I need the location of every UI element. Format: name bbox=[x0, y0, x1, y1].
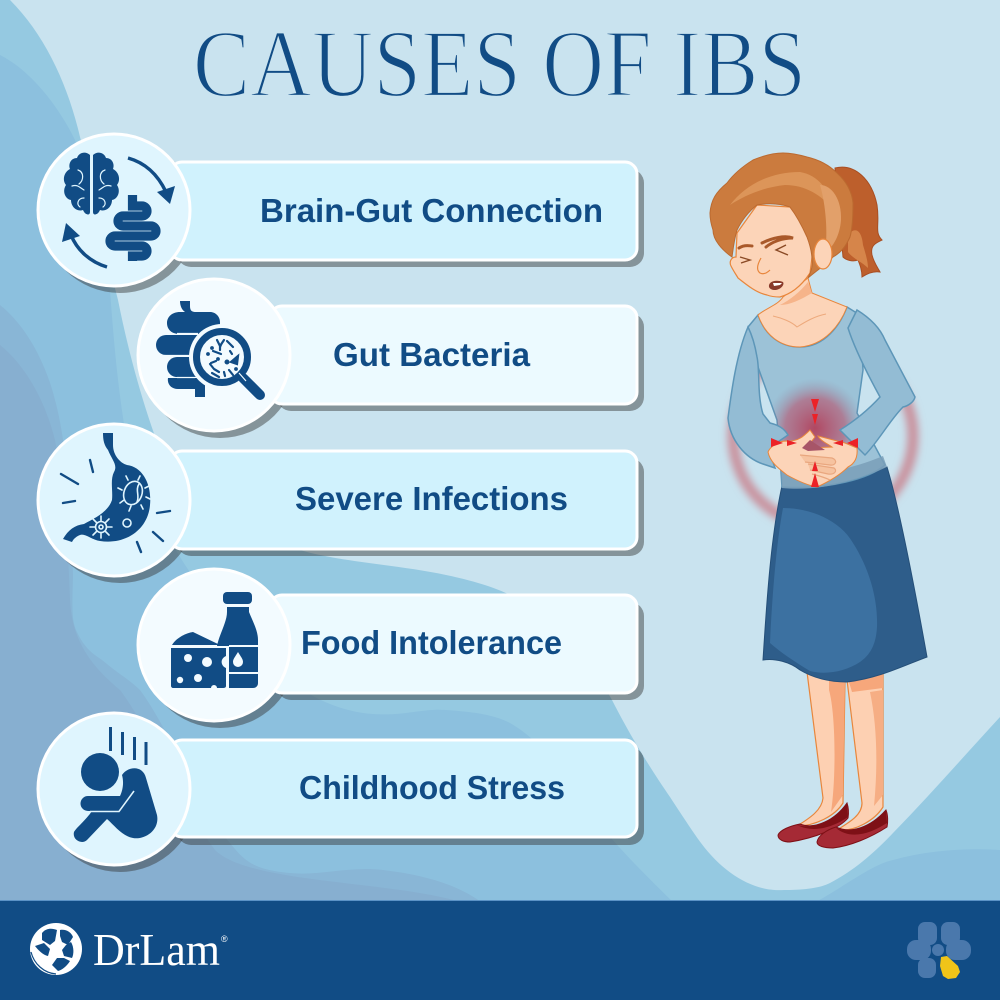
left sleeve bbox=[728, 327, 788, 468]
face bbox=[730, 205, 813, 297]
icon: cheese and milk bottle bbox=[171, 592, 258, 691]
label: Food Intolerance bbox=[301, 624, 562, 661]
icon: crouching stressed child bbox=[74, 727, 157, 842]
icon: brain and gut cycle bbox=[62, 153, 175, 267]
icon: infected stomach bbox=[61, 433, 170, 552]
list item: Brain-Gut Connection bbox=[38, 134, 644, 293]
hair bbox=[710, 153, 853, 278]
shoes bbox=[778, 803, 888, 848]
registered mark: ® bbox=[221, 934, 228, 944]
label: Gut Bacteria bbox=[333, 336, 531, 373]
logo: DrLam emblem bbox=[30, 923, 82, 975]
belly glow bbox=[774, 382, 858, 447]
list item: Childhood Stress bbox=[38, 713, 644, 872]
background wave: deepest blue bbox=[0, 345, 470, 905]
background wave: mid blue bbox=[0, 55, 676, 905]
list item: Severe Infections bbox=[38, 424, 644, 583]
icon: flower emblem bbox=[907, 922, 971, 979]
legs bbox=[797, 672, 883, 830]
skirt bbox=[763, 467, 927, 682]
label: Brain-Gut Connection bbox=[260, 192, 603, 229]
hands bbox=[768, 430, 857, 487]
red pain arrows bbox=[771, 399, 858, 487]
waistband overlay bbox=[781, 456, 887, 489]
ear bbox=[814, 239, 832, 269]
label: Childhood Stress bbox=[299, 769, 565, 806]
bacteria bbox=[207, 340, 238, 377]
icon: gut with magnifier bbox=[156, 301, 260, 397]
background wave: bottom right bbox=[810, 849, 1000, 905]
pain ring bbox=[733, 346, 913, 526]
right sleeve bbox=[840, 310, 915, 455]
shirt torso bbox=[748, 307, 885, 487]
illustration: woman with stomach pain bbox=[710, 153, 927, 848]
neck and chest bbox=[758, 278, 847, 347]
ponytail highlight bbox=[848, 230, 868, 268]
background wave: dusty blue bbox=[0, 305, 485, 905]
list item: Gut Bacteria bbox=[138, 279, 644, 438]
list item: Food Intolerance bbox=[138, 569, 644, 728]
logo: DrLam wordmark: DrLam bbox=[93, 924, 220, 975]
ponytail bbox=[835, 167, 882, 277]
label: Severe Infections bbox=[295, 480, 568, 517]
title: CAUSES OF IBS bbox=[193, 10, 806, 117]
footer band bbox=[0, 900, 1000, 1000]
